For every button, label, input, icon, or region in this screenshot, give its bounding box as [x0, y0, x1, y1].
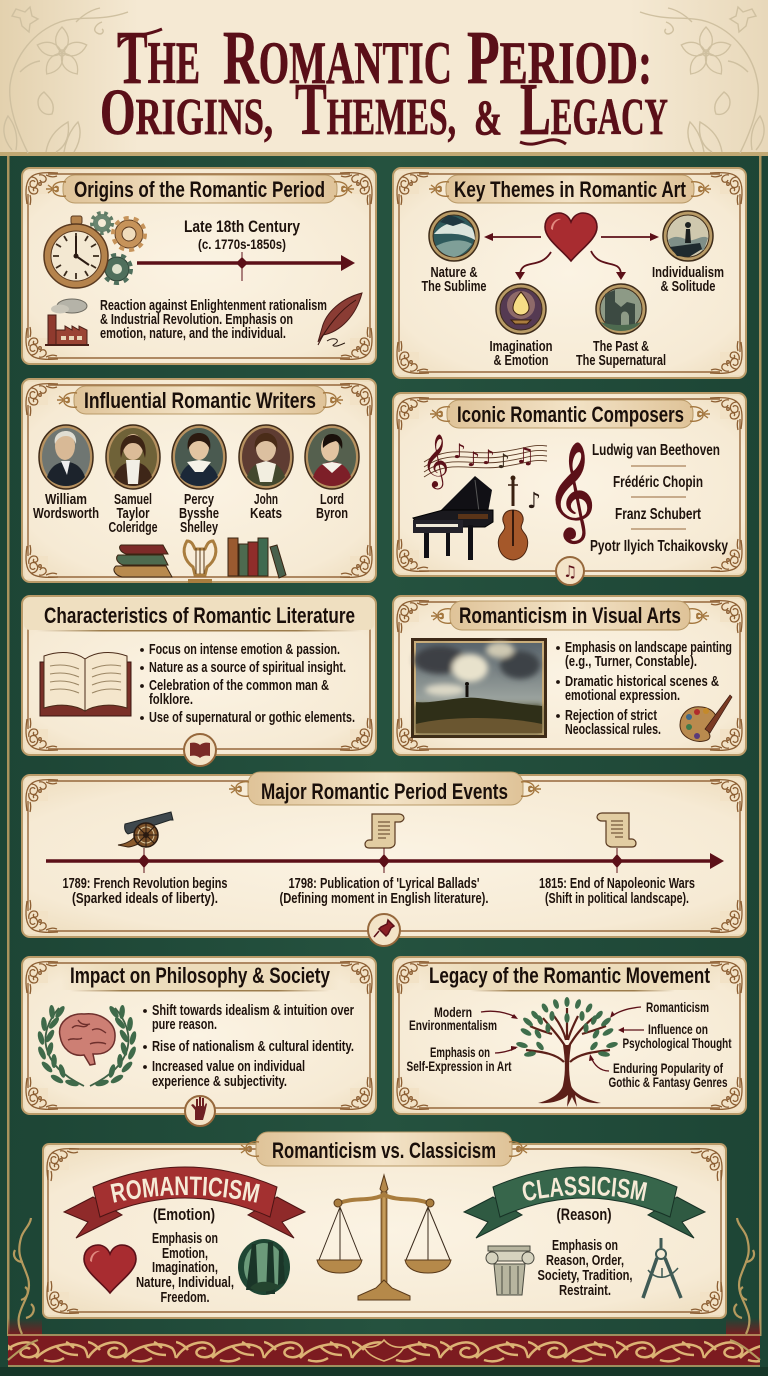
portrait: Shelley: [172, 425, 226, 489]
romanticism text: Emotion,: [162, 1246, 208, 1262]
bullet list: Increased value on individual: [152, 1059, 305, 1075]
name: Samuel: [114, 492, 152, 508]
label group left: Emphasis on: [430, 1044, 490, 1060]
bullet list: Celebration of the common man &: [149, 678, 329, 694]
icon: staff with notes: ♫: [515, 444, 535, 469]
label group right: Enduring Popularity of: [613, 1060, 723, 1076]
icon: staff with notes: ♪: [497, 449, 510, 473]
side rule left: [7, 156, 10, 1336]
panel: legacy: [393, 957, 746, 1114]
icon: brain in laurel: [36, 1005, 138, 1088]
icon: upright books: [228, 538, 286, 578]
banner: romanticism: ROMANTICISM: [110, 1176, 260, 1203]
bullet list: Shift towards idealism & intuition over: [152, 1003, 354, 1019]
portrait: Keats: [239, 425, 293, 489]
bullet list: [143, 1003, 354, 1090]
banner: classicism: [463, 1166, 706, 1238]
composers list: Pyotr Ilyich Tchaikovsky: [590, 538, 728, 555]
title: &: [474, 89, 502, 145]
icon: staff with notes: [422, 433, 547, 489]
heading: Romanticism vs. Classicism: [272, 1138, 496, 1163]
banner: classicism: CLASSICISM: [522, 1176, 648, 1201]
date label: (c. 1770s-1850s): [198, 237, 286, 252]
romanticism text: Emphasis on: [152, 1231, 218, 1247]
name: Percy: [184, 492, 214, 508]
heading: Origins of the Romantic Period: [74, 177, 325, 202]
classicism text: Emphasis on: [552, 1238, 618, 1254]
name: Taylor: [116, 506, 150, 522]
name: William: [45, 492, 87, 508]
icon: open book: [40, 652, 131, 716]
icon: staff with notes: 𝄞: [422, 433, 449, 489]
panel: literature: [22, 596, 376, 766]
name: Byron: [316, 506, 348, 522]
date label: Late 18th Century: [184, 217, 300, 236]
painting: [411, 638, 547, 738]
icon: scales: [317, 1175, 451, 1300]
bullet list: Nature as a source of spiritual insight.: [149, 660, 346, 676]
romanticism text: (Emotion): [153, 1205, 215, 1224]
name: Bysshe: [179, 506, 219, 522]
icon: pocket watch and gears: [44, 213, 145, 288]
event 1798: (Defining moment in English literature).: [280, 891, 488, 907]
name: John: [254, 492, 278, 508]
label: & Solitude: [660, 279, 716, 295]
bullet list: folklore.: [149, 692, 193, 708]
label: Individualism: [652, 265, 724, 281]
label: [652, 265, 724, 295]
label group right: [608, 999, 732, 1090]
label group left: [406, 1004, 512, 1074]
romanticism text: Freedom.: [160, 1290, 210, 1306]
bullet list: pure reason.: [152, 1017, 217, 1033]
heading: Impact on Philosophy & Society: [70, 963, 331, 988]
icon: individualism: [663, 211, 713, 261]
title: THEMES,: [295, 69, 456, 151]
bullet list: emotional expression.: [565, 688, 680, 704]
gold vine right: [730, 1218, 760, 1360]
bottom ornamental band: [0, 1218, 768, 1376]
event 1789: [62, 876, 228, 907]
description: Reaction against Enlightenment rationalism: [100, 298, 327, 314]
panel: visual arts: [393, 596, 746, 755]
icon: ruined castle: [596, 284, 646, 334]
portrait: Wordsworth: [39, 425, 93, 489]
label group right: Influence on: [648, 1021, 708, 1037]
icon: staff with notes: ♪: [453, 439, 466, 463]
panel: composers: [393, 393, 746, 585]
icon: scroll 1798: [365, 814, 404, 848]
label: Imagination: [490, 339, 552, 355]
header banner: [0, 0, 768, 156]
panel: key themes: [393, 168, 746, 378]
title: LEGACY: [520, 69, 668, 151]
badge: pin: [368, 914, 400, 946]
date label: [184, 217, 300, 252]
name: [179, 492, 219, 536]
panel: origins: [22, 168, 376, 364]
heading: Iconic Romantic Composers: [457, 402, 684, 427]
label: [576, 339, 666, 369]
classicism text: Society, Tradition,: [538, 1268, 632, 1284]
heading: [239, 1132, 529, 1166]
icon: small note: ♪: [527, 489, 541, 514]
classicism text: [538, 1205, 632, 1299]
title: ORIGINS,: [100, 76, 273, 149]
name: [33, 492, 99, 522]
heading: Influential Romantic Writers: [84, 388, 316, 413]
icon: factory: [45, 299, 89, 346]
icon: forest: [238, 1239, 290, 1295]
composers list: Franz Schubert: [615, 506, 701, 523]
badge: music note: [556, 557, 584, 585]
name: Wordsworth: [33, 506, 99, 522]
icon: staff with notes: ♪: [482, 445, 495, 469]
heading: Romanticism in Visual Arts: [459, 603, 681, 628]
badge: hand: [185, 1096, 215, 1126]
name: [108, 492, 158, 536]
badge: music note: ♫: [563, 562, 577, 581]
panel: writers: [22, 379, 376, 582]
floral ornament right: [640, 7, 764, 153]
timeline: [46, 848, 724, 873]
bullet list: Neoclassical rules.: [565, 722, 661, 738]
bullet list: Rise of nationalism & cultural identity.: [152, 1039, 354, 1055]
description: & Industrial Revolution. Emphasis on: [100, 312, 293, 328]
event 1798: 1798: Publication of 'Lyrical Ballads': [288, 876, 480, 892]
name: Coleridge: [108, 520, 158, 536]
bullet list: (e.g., Turner, Constable).: [565, 654, 697, 670]
panel: major events: [22, 772, 746, 946]
panel: romanticism vs classicism: [42, 1132, 727, 1319]
label: [422, 265, 486, 295]
classicism text: (Reason): [556, 1205, 612, 1224]
romanticism text: [136, 1205, 234, 1306]
event 1789: 1789: French Revolution begins: [62, 876, 228, 892]
label: Nature &: [430, 265, 478, 281]
bullet list: Focus on intense emotion & passion.: [149, 642, 340, 658]
romanticism text: Imagination,: [152, 1260, 218, 1276]
event 1815: 1815: End of Napoleonic Wars: [539, 876, 695, 892]
gold vine left: [8, 1218, 38, 1360]
icon: imagination candle: [496, 284, 546, 334]
icon: nature and the sublime: [429, 211, 479, 261]
icon: tree: [516, 997, 618, 1107]
title: ROMANTIC: [223, 16, 452, 100]
classicism text: Restraint.: [559, 1283, 611, 1299]
arrows from heart: [484, 233, 659, 280]
event 1789: (Sparked ideals of liberty).: [72, 891, 218, 907]
name: Keats: [250, 506, 282, 522]
romanticism text: Nature, Individual,: [136, 1275, 234, 1291]
icon: heart: [545, 213, 597, 261]
badge: book: [184, 734, 216, 766]
label: The Past &: [593, 339, 649, 355]
name: [250, 492, 282, 522]
bullet list: experience & subjectivity.: [152, 1074, 287, 1090]
icon: violin: [498, 476, 528, 560]
icon: palette: [680, 695, 732, 741]
heading: Major Romantic Period Events: [261, 779, 508, 804]
label group left: Environmentalism: [409, 1017, 497, 1033]
bullet list: Rejection of strict: [565, 708, 657, 724]
heading: Characteristics of Romantic Literature: [44, 603, 355, 628]
icon: scroll 1815: [597, 813, 636, 847]
classicism text: Reason, Order,: [546, 1253, 624, 1269]
icon: quill: [318, 293, 362, 346]
title: PERIOD:: [467, 16, 652, 100]
icon: compass: [643, 1238, 681, 1298]
icon: grand piano: [413, 476, 493, 560]
icon: heart: [84, 1245, 136, 1293]
title: THE: [117, 16, 200, 100]
timeline arrow: [137, 252, 355, 281]
event 1815: [539, 876, 695, 907]
name: Shelley: [180, 520, 218, 536]
event 1798: [280, 876, 488, 907]
label: & Emotion: [494, 353, 548, 369]
composers list: [590, 442, 728, 555]
bullet list: Dramatic historical scenes &: [565, 674, 719, 690]
label group right: Romanticism: [646, 999, 709, 1015]
portrait: Coleridge: [106, 425, 160, 489]
bullet list: [556, 640, 732, 738]
icon: treble clef: 𝄞: [546, 441, 596, 543]
label: The Supernatural: [576, 353, 666, 369]
icon: lyre: [184, 541, 216, 581]
side rule right: [759, 156, 762, 1336]
description: emotion, nature, and the individual.: [100, 326, 286, 342]
description: [100, 298, 327, 342]
event 1815: (Shift in political landscape).: [545, 891, 689, 907]
floral ornament left: [4, 7, 128, 153]
icon: cannon: [118, 812, 173, 847]
center ornament: [364, 1340, 404, 1361]
connector arrows: [481, 1007, 644, 1071]
icon: staff with notes: ♪: [467, 447, 480, 471]
label: [490, 339, 552, 369]
heading: [229, 772, 541, 805]
composers list: Frédéric Chopin: [613, 474, 703, 491]
heading: Key Themes in Romantic Art: [454, 177, 687, 202]
label group left: Modern: [434, 1004, 472, 1020]
bullet list: Use of supernatural or gothic elements.: [149, 710, 355, 726]
name: Lord: [320, 492, 344, 508]
title: [100, 16, 668, 151]
portrait: Byron: [305, 425, 359, 489]
icon: ionic column: [486, 1246, 534, 1295]
label: The Sublime: [422, 279, 486, 295]
banner: romanticism: [63, 1166, 306, 1238]
panel: philosophy: [22, 957, 376, 1126]
icon: book stack: [114, 545, 172, 577]
label group left: Self-Expression in Art: [406, 1058, 512, 1074]
name: [316, 492, 348, 522]
heading: [24, 598, 374, 632]
bullet list: [140, 642, 355, 726]
composers list: Ludwig van Beethoven: [592, 442, 720, 459]
